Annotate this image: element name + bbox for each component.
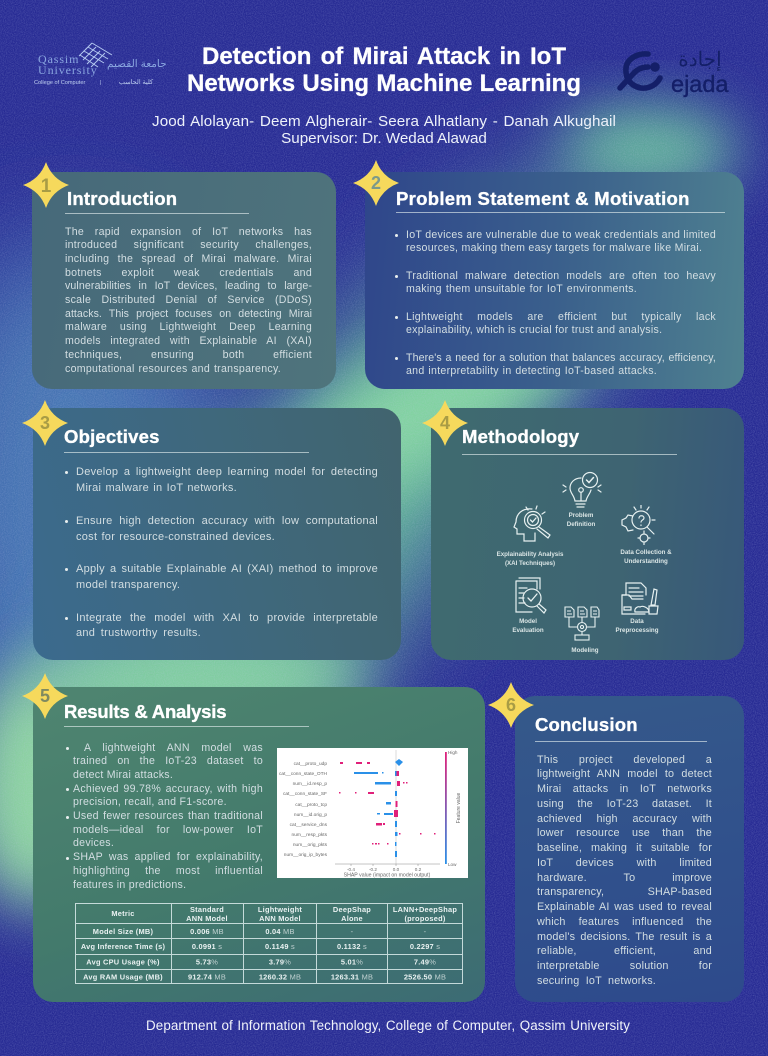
text: conclusion body: Mirai attacks in IoT networks <box>537 783 712 795</box>
text: conclusion body <box>537 754 712 987</box>
chart: SHAP summary plot: Feature value <box>456 792 462 823</box>
text: problem statement bullets: Traditional malware detection models are often too heavy <box>406 270 716 282</box>
table: model metrics: 5.01% <box>341 958 363 966</box>
table: model metrics: 0.006 MB <box>190 927 224 936</box>
title: Networks Using Machine Learning <box>187 70 581 97</box>
panel: objectives <box>33 408 401 660</box>
table: model metrics: ANN Model <box>259 914 301 923</box>
heading: methodology: Methodology <box>462 426 579 447</box>
logo: Ejada: ejada <box>671 71 728 97</box>
chart: SHAP summary plot: num__id.orig_p <box>294 812 327 818</box>
table: model metrics: ANN Model <box>186 914 228 923</box>
table: model metrics: Avg Inference Time (s) <box>81 942 165 951</box>
label: problem definition: Definition <box>567 521 595 528</box>
label: problem definition <box>567 512 595 528</box>
label: data preprocessing: Data <box>630 618 644 625</box>
text: results bullets: precision, recall, and F1-score. <box>73 796 227 808</box>
text: objectives bullets: Integrate the model with XAI to provide interpretable <box>76 612 378 624</box>
icon: star 3: 3 <box>40 413 50 433</box>
table: model metrics: 1260.32 MB <box>259 972 301 982</box>
icon: data collection <box>621 505 656 545</box>
icon: data preprocessing <box>621 582 659 615</box>
icon: star 1 <box>23 162 69 208</box>
text: objectives bullets: model transparency. <box>76 579 180 591</box>
title: Detection of Mirai Attack in IoT <box>202 43 566 70</box>
table: model metrics: 0.04 MB <box>265 927 295 936</box>
table: model metrics: 5.73% <box>196 958 218 966</box>
text: problem statement bullets: resources, making them easy targets for malware like Mirai. <box>406 242 702 254</box>
text: conclusion body: model's decisions. The result is a <box>537 930 712 942</box>
chart: SHAP summary plot: cat__conn_state_SF <box>283 791 327 797</box>
text: conclusion body: interpretable solution for <box>537 960 712 972</box>
table: model metrics: Metric <box>111 909 135 918</box>
text: results bullets: SHAP was applied for explainability, <box>73 851 263 863</box>
heading: introduction: Introduction <box>67 188 177 209</box>
text: conclusion body: transparency, SHAP-based <box>537 886 712 898</box>
text: results bullets: models—ideal for low-power IoT <box>73 824 263 836</box>
text: conclusion body: IoT devices with limited <box>537 857 712 869</box>
text: problem statement bullets: explainability, which is crucial for trust and analysis. <box>406 324 662 336</box>
logo: Ejada <box>617 49 729 98</box>
chart: SHAP summary plot: Low <box>448 862 457 867</box>
label: data collection <box>620 549 672 565</box>
text: introduction body: computational resources and transparency. <box>65 362 281 374</box>
logo: Qassim University: University <box>38 62 98 76</box>
text: results bullets: features in predictions. <box>73 878 186 890</box>
table: model metrics: 0.0991 s <box>192 942 222 951</box>
icon: star 3 <box>22 400 68 446</box>
chart: SHAP summary plot: cat__proto_tcp <box>295 802 327 808</box>
label: data collection: Understanding <box>624 558 668 565</box>
icon: star 2 <box>353 160 399 206</box>
panel: results and analysis <box>33 687 485 1002</box>
table: model metrics: Standard <box>190 905 224 914</box>
chart: SHAP summary plot: 0.2 <box>415 867 422 872</box>
text: problem statement bullets: making them unsuitable for IoT environments. <box>406 283 637 295</box>
text: introduction body: models integrated with Explainable AI (XAI) <box>65 335 312 347</box>
text: conclusion body: This project developed a <box>537 754 712 766</box>
table: model metrics: 912.74 MB <box>188 972 226 982</box>
text: objectives bullets: and trustworthy results. <box>76 627 201 639</box>
icon: explainability analysis <box>513 505 551 542</box>
table: model metrics: Alone <box>341 914 363 923</box>
text: problem statement bullets: Lightweight models are efficient but typically lack <box>406 310 716 322</box>
panel: methodology <box>431 408 744 660</box>
text: objectives bullets: cost for resource-constrained devices. <box>76 531 275 543</box>
text: results bullets: A lightweight ANN model was <box>84 742 263 754</box>
chart: SHAP summary plot: -0.2 <box>369 867 377 872</box>
label: modeling: Modeling <box>571 647 599 654</box>
table: model metrics: LANN+DeepShap <box>393 905 457 914</box>
icon: star 4: 4 <box>440 413 450 433</box>
icon: star 4 <box>422 400 468 446</box>
icon: modeling <box>564 606 600 641</box>
text: objectives bullets: Mirai malware in IoT networks. <box>76 482 237 494</box>
chart: SHAP summary plot: High <box>448 750 458 755</box>
label: explainability analysis: Explainability Analysis <box>497 551 563 558</box>
text: problem statement bullets: and interpretability in detecting IoT-based attacks. <box>406 365 657 377</box>
text: introduction body: scale Distributed Denial of Service (DDoS) <box>65 294 312 306</box>
label: data preprocessing: Preprocessing <box>616 627 658 634</box>
label: problem definition: Problem <box>569 512 593 519</box>
icon: star 2: 2 <box>371 173 381 193</box>
text: results bullets: trained on the IoT-23 dataset to <box>73 755 263 767</box>
table: model metrics: Model Size (MB) <box>93 927 153 936</box>
text: objectives bullets: Apply a suitable Explainable AI (XAI) method to improve <box>76 563 378 575</box>
table: model metrics: (proposed) <box>404 914 446 923</box>
text: introduction body: botnets exploit weak credentials and <box>65 267 312 279</box>
text: results bullets: devices. <box>73 837 114 849</box>
text: introduction body: introduced significant security challenges, <box>65 239 312 251</box>
text: objectives bullets: Ensure high detection accuracy with low computational <box>76 515 378 527</box>
logo: Ejada: إجادة <box>678 49 722 71</box>
logo: Qassim University <box>34 42 167 86</box>
text: conclusion body: reliable, efficient, and <box>537 945 712 957</box>
text: conclusion body: lightweight ANN model to detect <box>537 768 712 780</box>
label: model evaluation: Model <box>519 618 537 625</box>
logo: Qassim University: | <box>100 80 101 86</box>
icon: star 5: 5 <box>40 686 50 706</box>
text: conclusion body: Explainable AI was used to reveal <box>537 901 712 913</box>
text: results bullets: highlighting the most influential <box>73 865 263 877</box>
table: model metrics: Avg RAM Usage (MB) <box>83 972 163 982</box>
heading: objectives: Objectives <box>64 426 160 447</box>
text: results bullets: detect Mirai attacks. <box>73 769 173 781</box>
text: introduction body: The rapid expansion of IoT networks has <box>65 226 312 238</box>
chart: SHAP summary plot: cat__conn_state_OTH <box>279 771 328 777</box>
text: introduction body <box>65 226 312 374</box>
text: problem statement bullets: IoT devices are vulnerable due to weak credentials and limited <box>406 228 716 240</box>
label: explainability analysis: (XAI Techniques) <box>505 560 555 567</box>
text: results bullets: Used fewer resources than traditional <box>73 810 263 822</box>
text: results bullets: Achieved 99.78% accuracy, with high <box>73 783 263 795</box>
table: model metrics: Avg CPU Usage (%) <box>86 958 160 966</box>
table: model metrics: DeepShap <box>333 905 371 914</box>
text: problem statement bullets: There's a need for a solution that balances accuracy, efficiency, <box>406 352 716 364</box>
heading: conclusion: Conclusion <box>535 714 638 735</box>
label: model evaluation <box>512 618 544 634</box>
chart: SHAP summary plot: 0.0 <box>393 867 400 872</box>
heading: problem statement: Problem Statement & Motivation <box>396 188 690 209</box>
table: model metrics: 0.1132 s <box>337 942 367 951</box>
chart: SHAP summary plot: cat__proto_udp <box>294 761 327 767</box>
label: explainability analysis <box>497 551 564 567</box>
panel: problem statement <box>365 172 744 389</box>
logo: Qassim University: جامعة القصيم <box>107 58 167 70</box>
table: model metrics: 0.2297 s <box>410 942 440 951</box>
icon: problem definition <box>562 472 602 508</box>
icon: star 6: 6 <box>506 695 516 715</box>
text: conclusion body: hardware. To improve <box>537 872 712 884</box>
chart: SHAP summary plot: num__orig_pkts <box>293 842 328 848</box>
text: conclusion body: using the IoT-23 dataset. It <box>537 798 712 810</box>
footer: Department of Information Technology, College of Computer, Qassim University <box>146 1018 630 1033</box>
authors <box>152 113 616 147</box>
table: model metrics: 2526.50 MB <box>404 972 446 982</box>
text: conclusion body: achieved high accuracy with <box>537 812 712 824</box>
table: model metrics: 7.49% <box>414 958 436 966</box>
authors: Supervisor: Dr. Wedad Alawad <box>281 130 487 147</box>
text: problem statement bullets <box>395 228 716 377</box>
chart: SHAP summary plot: -0.4 <box>347 867 355 872</box>
table: model metrics <box>75 903 463 984</box>
table: model metrics: Lightweight <box>258 905 302 914</box>
title <box>187 43 581 97</box>
text: conclusion body: which features influenced the <box>537 916 712 928</box>
table: model metrics: - <box>351 927 354 936</box>
text: introduction body: malware using Lightweight Deep Learning <box>65 321 312 333</box>
chart: SHAP summary plot: cat__service_dns <box>290 822 328 828</box>
label: data collection: Data Collection & <box>620 549 672 556</box>
text: results bullets <box>66 742 263 890</box>
text: introduction body: techniques, ensuring both efficient <box>65 349 312 361</box>
label: model evaluation: Evaluation <box>512 627 544 634</box>
text: conclusion body: lower resource use than the <box>537 827 712 839</box>
icon: star 5 <box>22 673 68 719</box>
panel: conclusion <box>515 696 744 1002</box>
icon: model evaluation <box>515 577 547 614</box>
panel: introduction <box>32 172 336 389</box>
text: objectives bullets: Develop a lightweight deep learning model for detecting <box>76 466 378 478</box>
text: introduction body: vulnerabilities in IoT devices, leading to large- <box>65 280 312 292</box>
table: model metrics: - <box>424 927 427 936</box>
text: conclusion body: securing IoT networks. <box>537 975 656 987</box>
chart: SHAP summary plot: num__orig_ip_bytes <box>284 852 328 858</box>
chart: SHAP summary plot <box>277 748 468 878</box>
icon: star 1: 1 <box>41 176 52 197</box>
text: objectives bullets <box>65 466 378 639</box>
icon: star 6 <box>488 682 534 728</box>
logo: Qassim University: College of Computer <box>34 80 85 86</box>
chart: SHAP summary plot: num__resp_pkts <box>292 832 328 838</box>
text: conclusion body: baseline, making it suitable for <box>537 842 712 854</box>
table: model metrics: 1263.31 MB <box>331 972 373 982</box>
chart: SHAP summary plot: num__id.resp_p <box>293 781 327 787</box>
label: data preprocessing <box>616 618 658 634</box>
table: model metrics: 0.1149 s <box>265 942 295 951</box>
text: introduction body: including the spread of Mirai malware. Mirai <box>65 253 312 265</box>
text: introduction body: attacks. This project focuses on detecting Mirai <box>65 308 312 320</box>
logo: Qassim University: كلية الحاسب <box>119 79 153 86</box>
authors: Jood Alolayan- Deem Algherair- Seera Alhatlany - Danah Alkughail <box>152 113 616 130</box>
table: model metrics: 3.79% <box>269 958 291 966</box>
heading: results: Results & Analysis <box>64 701 226 722</box>
logo: Qassim University: Qassim <box>38 52 79 66</box>
